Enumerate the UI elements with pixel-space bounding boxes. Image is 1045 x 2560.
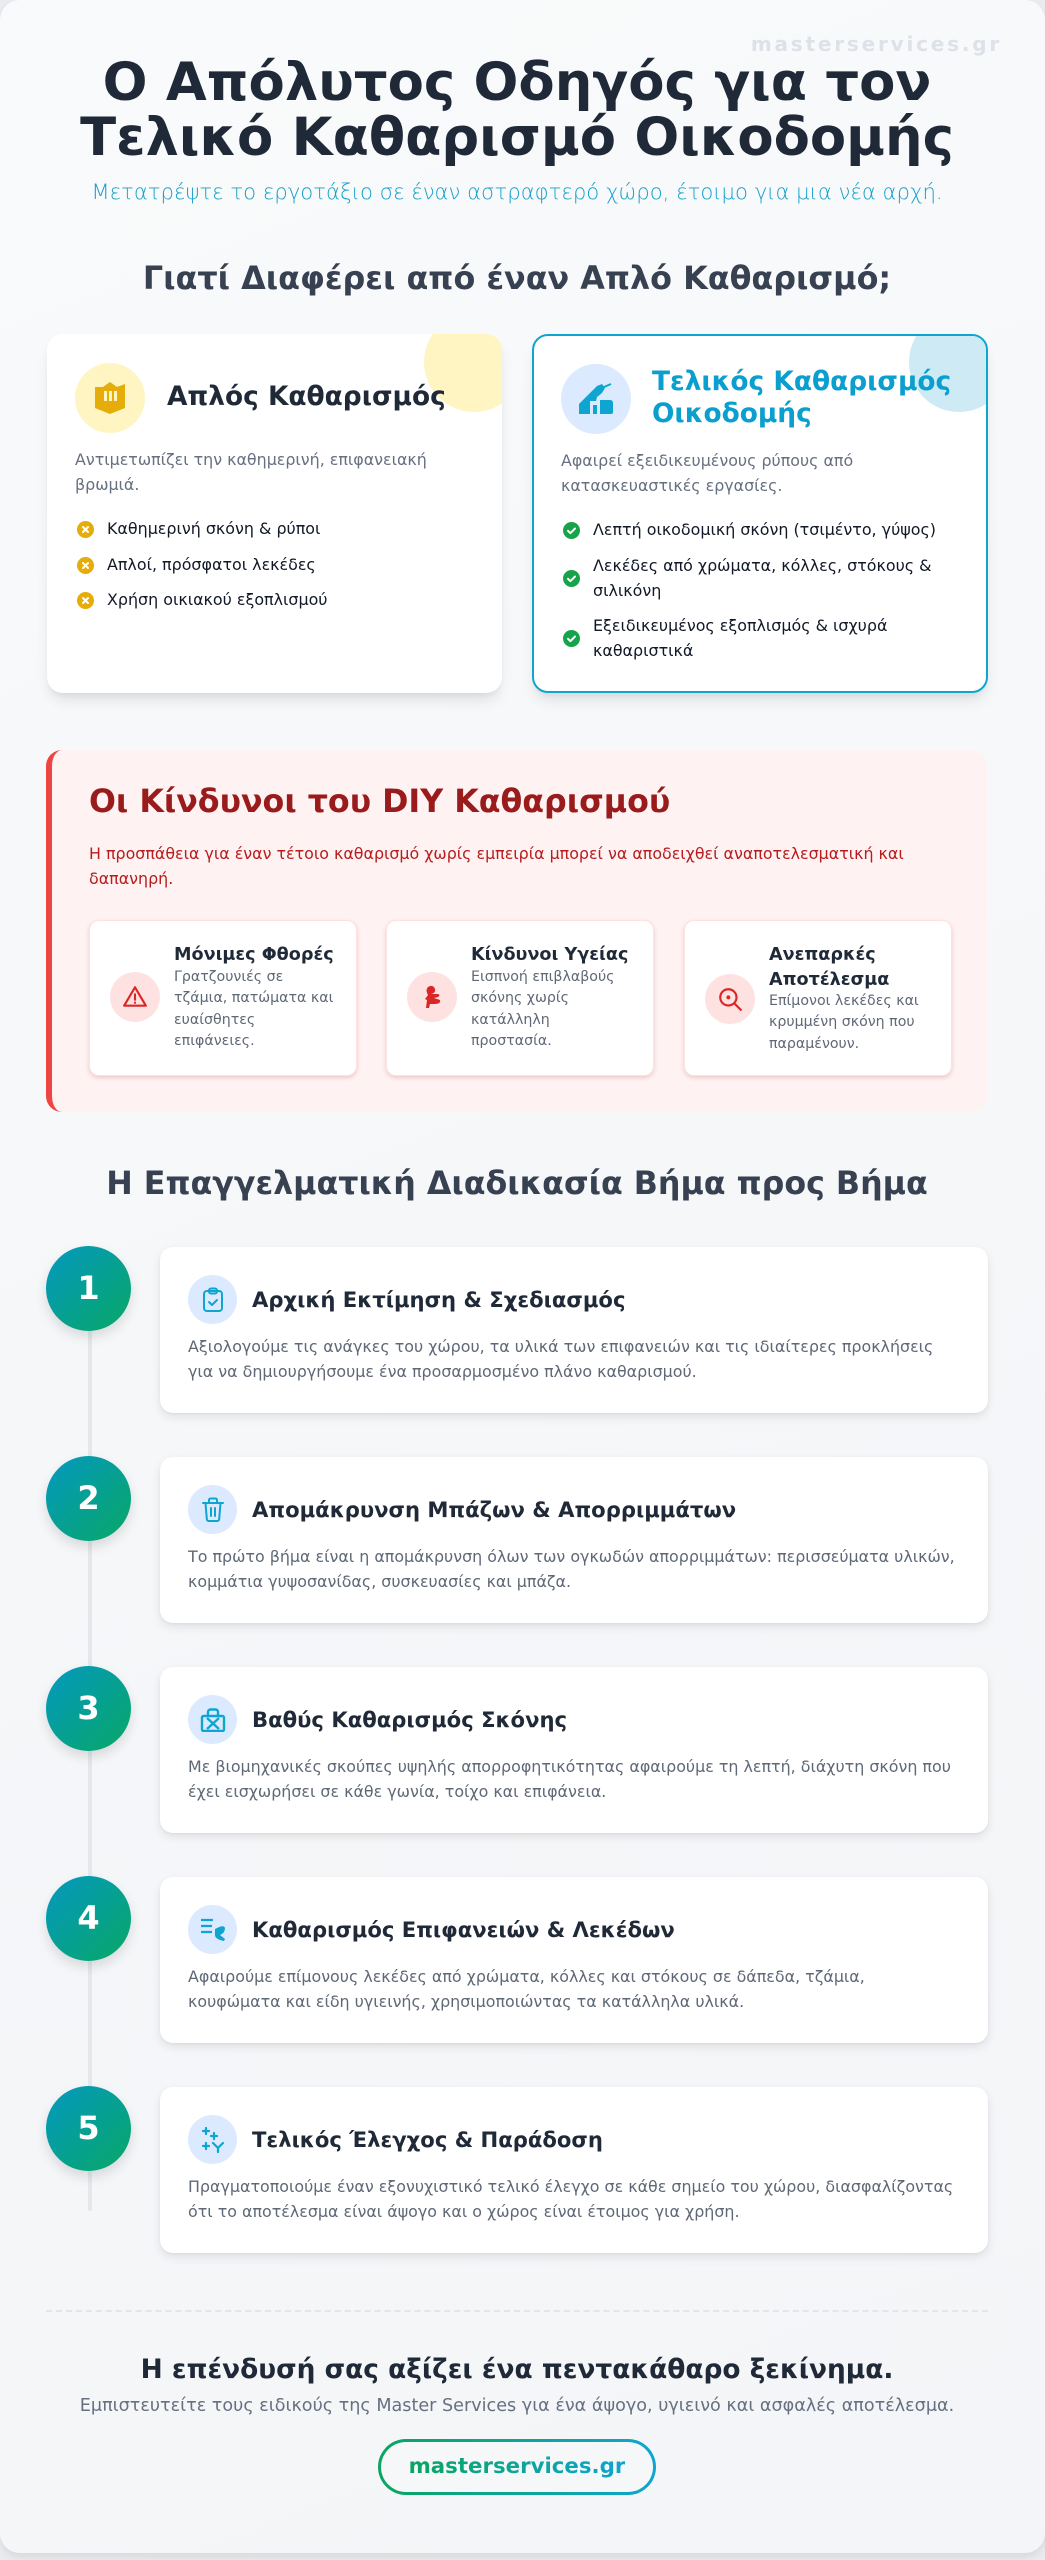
step number — [46, 1456, 131, 1541]
card text — [769, 993, 919, 1052]
decorative corner circle — [909, 312, 1009, 412]
icon: sparkles — [188, 2115, 237, 2164]
heading: DIY dangers: Οι Κίνδυνοι του DIY Καθαρισμού — [89, 784, 670, 820]
card text: σκόνης χωρίς — [471, 990, 569, 1006]
panel: final construction cleaning — [532, 334, 988, 693]
heading: process: Η Επαγγελματική Διαδικασία Βήμα προς Βήμα — [106, 1166, 928, 1202]
step text — [188, 1757, 951, 1800]
card title: Αποτέλεσμα — [769, 970, 889, 990]
step text: Αφαιρούμε επίμονους λεκέδες από χρώματα, κόλλες και στόκους σε δάπεδα, τζάμια, — [188, 1967, 865, 1986]
list item: Εξειδικευμένος εξοπλισμός & ισχυρά — [593, 616, 887, 635]
step text — [188, 1547, 955, 1590]
step 4 — [43, 1876, 990, 2048]
list item — [593, 556, 932, 600]
footer text: Εμπιστευτείτε τους ειδικούς της Master Services για ένα άψογο, υγιεινό και ασφαλές αποτέλεσμα. — [80, 2396, 954, 2416]
step card — [160, 1877, 988, 2043]
list item: Απλοί, πρόσφατοι λεκέδες — [107, 555, 316, 574]
heading: why it differs: Γιατί Διαφέρει από έναν Απλό Καθαρισμό; — [143, 260, 891, 297]
card text: Επίμονοι λεκέδες και — [769, 993, 919, 1009]
list item: καθαριστικά — [593, 641, 693, 660]
step number — [46, 1666, 131, 1751]
list item: Χρήση οικιακού εξοπλισμού — [107, 590, 328, 609]
step title: Βαθύς Καθαρισμός Σκόνης — [252, 1707, 567, 1732]
step title: Τελικός Έλεγχος & Παράδοση — [252, 2127, 603, 2152]
step number — [46, 1246, 131, 1331]
title: Τελικό Καθαρισμό Οικοδομής — [80, 107, 954, 168]
step text: Αξιολογούμε τις ανάγκες του χώρου, τα υλικά των επιφανειών και τις ιδιαίτερες προκλήσεις — [188, 1337, 933, 1356]
icon: check — [563, 630, 580, 647]
step text: Με βιομηχανικές σκούπες υψηλής απορροφητικότητας αφαιρούμε τη λεπτή, διάχυτη σκόνη που — [188, 1757, 951, 1776]
decorative corner circle — [424, 312, 524, 412]
website link: masterservices.gr — [409, 2454, 625, 2479]
card description: Αντιμετωπίζει την καθημερινή, επιφανειακή — [75, 450, 427, 469]
step number: 3 — [77, 1689, 100, 1727]
danger intro text: δαπανηρή. — [89, 869, 173, 888]
card description — [75, 450, 427, 494]
card title — [652, 366, 951, 429]
panel: DIY dangers — [46, 750, 987, 1112]
icon: trash — [188, 1485, 237, 1534]
step card — [160, 2087, 988, 2253]
list item: Λεπτή οικοδομική σκόνη (τσιμέντο, γύψος) — [593, 520, 936, 539]
footer heading: Η επένδυσή σας αξίζει ένα πεντακάθαρο ξεκίνημα. — [141, 2354, 893, 2385]
step 3 — [43, 1666, 990, 1838]
card text: τζάμια, πατώματα και — [174, 990, 333, 1006]
card text: προστασία. — [471, 1033, 552, 1049]
danger card: inadequate result — [684, 920, 952, 1076]
card text — [174, 969, 333, 1049]
card description: βρωμιά. — [75, 475, 139, 494]
step text: Πραγματοποιούμε έναν εξονυχιστικό τελικό έλεγχο σε κάθε σημείο του χώρου, διασφαλίζοντας — [188, 2177, 953, 2196]
step number — [46, 1876, 131, 1961]
watermark: masterservices.gr — [751, 32, 1002, 56]
list item: σιλικόνη — [593, 581, 661, 600]
step number: 2 — [77, 1479, 100, 1517]
step card — [160, 1667, 988, 1833]
step 1 — [43, 1246, 990, 1418]
step text — [188, 2177, 953, 2220]
step title: Αρχική Εκτίμηση & Σχεδιασμός — [252, 1287, 625, 1312]
timeline line — [88, 1300, 92, 2211]
icon: cross — [77, 557, 94, 574]
card text: Εισπνοή επιβλαβούς — [471, 969, 614, 985]
step text: έχει εισχωρήσει σε κάθε γωνία, τοίχο και επιφάνεια. — [188, 1782, 606, 1800]
danger card: permanent damage — [89, 920, 357, 1076]
card text — [471, 969, 614, 1049]
list item: Καθημερινή σκόνη & ρύποι — [107, 519, 320, 538]
danger intro text: Η προσπάθεια για έναν τέτοιο καθαρισμό χωρίς εμπειρία μπορεί να αποδειχθεί αναποτελεσματική και — [89, 844, 904, 863]
step card — [160, 1247, 988, 1413]
step text — [188, 1337, 933, 1380]
step number — [46, 2086, 131, 2171]
danger intro text — [89, 844, 904, 888]
icon: check — [563, 522, 580, 539]
danger card: health risks — [386, 920, 654, 1076]
card title — [769, 945, 889, 990]
card description: Αφαιρεί εξειδικευμένους ρύπους από — [561, 451, 853, 470]
title: Ο Απόλυτος Οδηγός για τον — [103, 52, 931, 113]
step card — [160, 1457, 988, 1623]
step title: Απομάκρυνση Μπάζων & Απορριμμάτων — [252, 1497, 736, 1522]
list item: Λεκέδες από χρώματα, κόλλες, στόκους & — [593, 556, 932, 575]
icon: check — [563, 570, 580, 587]
card description: κατασκευαστικές εργασίες. — [561, 476, 782, 495]
step number: 1 — [77, 1269, 100, 1307]
step text: ότι το αποτέλεσμα είναι άψογο και ο χώρος είναι έτοιμος για χρήση. — [188, 2202, 740, 2220]
step title: Καθαρισμός Επιφανειών & Λεκέδων — [252, 1917, 675, 1942]
step text: κουφώματα και είδη υγιεινής, χρησιμοποιώντας τα κατάλληλα υλικά. — [188, 1992, 744, 2010]
icon: magnifier — [705, 974, 755, 1024]
card description — [561, 451, 853, 495]
step text: Το πρώτο βήμα είναι η απομάκρυνση όλων των ογκωδών απορριμμάτων: περισσεύματα υλικών, — [188, 1547, 955, 1566]
card text: κρυμμένη σκόνη που — [769, 1014, 915, 1030]
step text: για να δημιουργήσουμε ένα προσαρμοσμένο πλάνο καθαρισμού. — [188, 1362, 697, 1380]
step text — [188, 1967, 865, 2010]
step text: κομμάτια γυψοσανίδας, συσκευασίες και μπάζα. — [188, 1572, 571, 1590]
icon: health — [407, 972, 457, 1022]
icon: clipboard — [188, 1275, 237, 1324]
icon: warning — [110, 972, 160, 1022]
subtitle: Μετατρέψτε το εργοτάξιο σε έναν αστραφτερό χώρο, έτοιμο για μια νέα αρχή. — [91, 179, 943, 204]
panel: simple cleaning — [47, 334, 502, 693]
card title: Ανεπαρκές — [769, 945, 876, 965]
card text: παραμένουν. — [769, 1036, 859, 1052]
step 5 — [43, 2086, 990, 2258]
card title: Οικοδομής — [652, 398, 812, 429]
step number: 5 — [77, 2109, 100, 2147]
card text: ευαίσθητες — [174, 1012, 255, 1028]
icon: cross — [77, 592, 94, 609]
website button — [378, 2439, 656, 2495]
icon: surface lines — [188, 1905, 237, 1954]
icon: final cleaning — [561, 364, 631, 434]
card title: Κίνδυνοι Υγείας — [471, 945, 628, 965]
card text: κατάλληλη — [471, 1012, 550, 1028]
card text: Γρατζουνιές σε — [174, 969, 283, 985]
icon: cross — [77, 521, 94, 538]
card title: Τελικός Καθαρισμός — [652, 366, 951, 397]
icon: simple cleaning — [75, 363, 145, 433]
icon: vacuum bag — [188, 1695, 237, 1744]
title — [80, 52, 954, 168]
card text: επιφάνειες. — [174, 1033, 255, 1049]
card title: Μόνιμες Φθορές — [174, 945, 334, 965]
card title: Απλός Καθαρισμός — [167, 381, 446, 412]
list item — [593, 616, 887, 660]
step number: 4 — [77, 1899, 100, 1937]
step 2 — [43, 1456, 990, 1628]
